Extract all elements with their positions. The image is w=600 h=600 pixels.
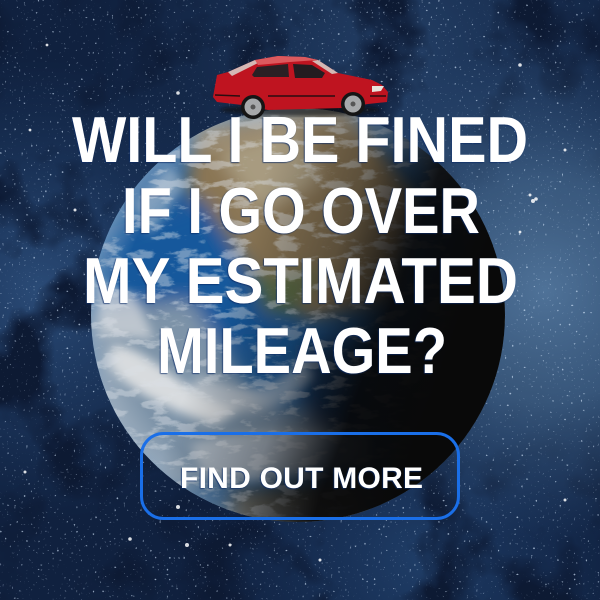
title: WILL I BE FINED [72,103,528,176]
car body [213,56,388,110]
title: MY ESTIMATED [83,244,518,317]
car windows [252,64,289,77]
button: find out more [142,434,458,518]
front wheel [341,92,365,116]
earth globe [85,100,510,530]
title: MILEAGE? [157,314,447,387]
button: find out more: FIND OUT MORE [180,462,423,495]
car [213,56,388,119]
car shadow [220,104,380,116]
car roof highlight [228,60,338,76]
car trim [215,95,386,96]
title: IF I GO OVER [122,174,480,247]
title [72,103,528,387]
rear wheel [241,95,265,119]
